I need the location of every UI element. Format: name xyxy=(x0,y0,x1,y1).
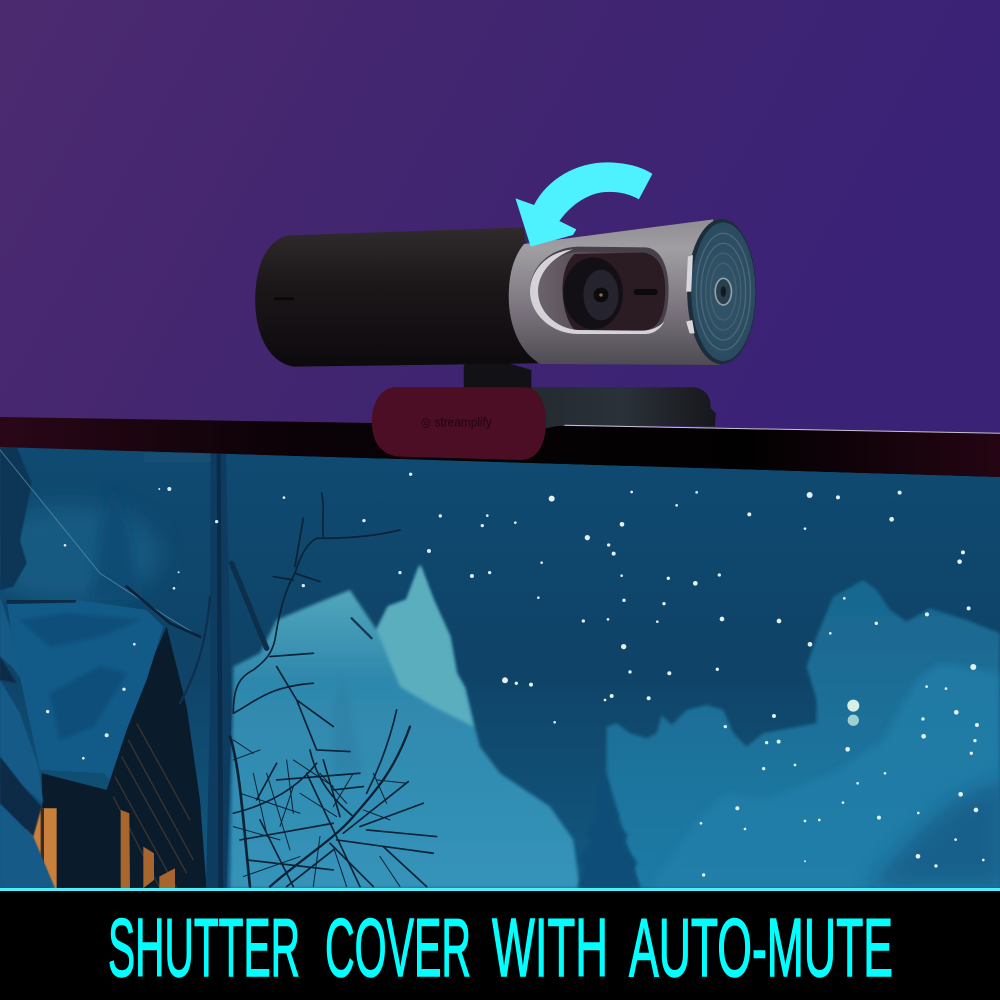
monitor edge highlight xyxy=(564,425,1000,433)
clouds on the right xyxy=(607,580,1000,888)
caption bar xyxy=(0,888,1000,1000)
house and roof xyxy=(0,447,207,888)
lens window xyxy=(530,247,669,334)
snowflakes right xyxy=(502,491,985,877)
microphone end disc xyxy=(686,219,756,364)
streamplify logo: ◎ streamplify xyxy=(421,415,492,430)
snowflakes left xyxy=(46,473,491,760)
snow roof xyxy=(7,600,163,780)
bright crescent rim xyxy=(530,249,664,334)
windows xyxy=(26,808,57,888)
purple wall background xyxy=(0,0,1000,450)
mountain xyxy=(230,565,580,888)
rotation arrow xyxy=(515,162,652,247)
log wall xyxy=(113,723,193,888)
caption text: WITH xyxy=(492,901,608,994)
utility pole xyxy=(144,453,232,888)
bare tree branches and wires xyxy=(0,450,437,887)
indicator slot xyxy=(634,289,657,295)
lens xyxy=(563,257,623,329)
webcam mount and camera xyxy=(255,162,1000,460)
body slot xyxy=(274,297,294,300)
caption text: COVER xyxy=(325,901,471,994)
snowy tree at left edge xyxy=(0,447,32,590)
cyan divider line xyxy=(0,888,1000,891)
black camera body xyxy=(255,227,537,367)
swivel neck xyxy=(464,358,531,390)
fir tree right xyxy=(577,778,640,888)
left sky glow xyxy=(0,505,160,605)
caption text: SHUTTER xyxy=(108,901,300,994)
faint fir left xyxy=(90,478,145,600)
maroon clip front xyxy=(372,387,546,460)
monitor top bezel xyxy=(0,417,1000,477)
monitor screen: winter night painting xyxy=(0,447,1000,888)
silver shutter sleeve xyxy=(509,219,720,365)
clip arm xyxy=(531,387,716,428)
